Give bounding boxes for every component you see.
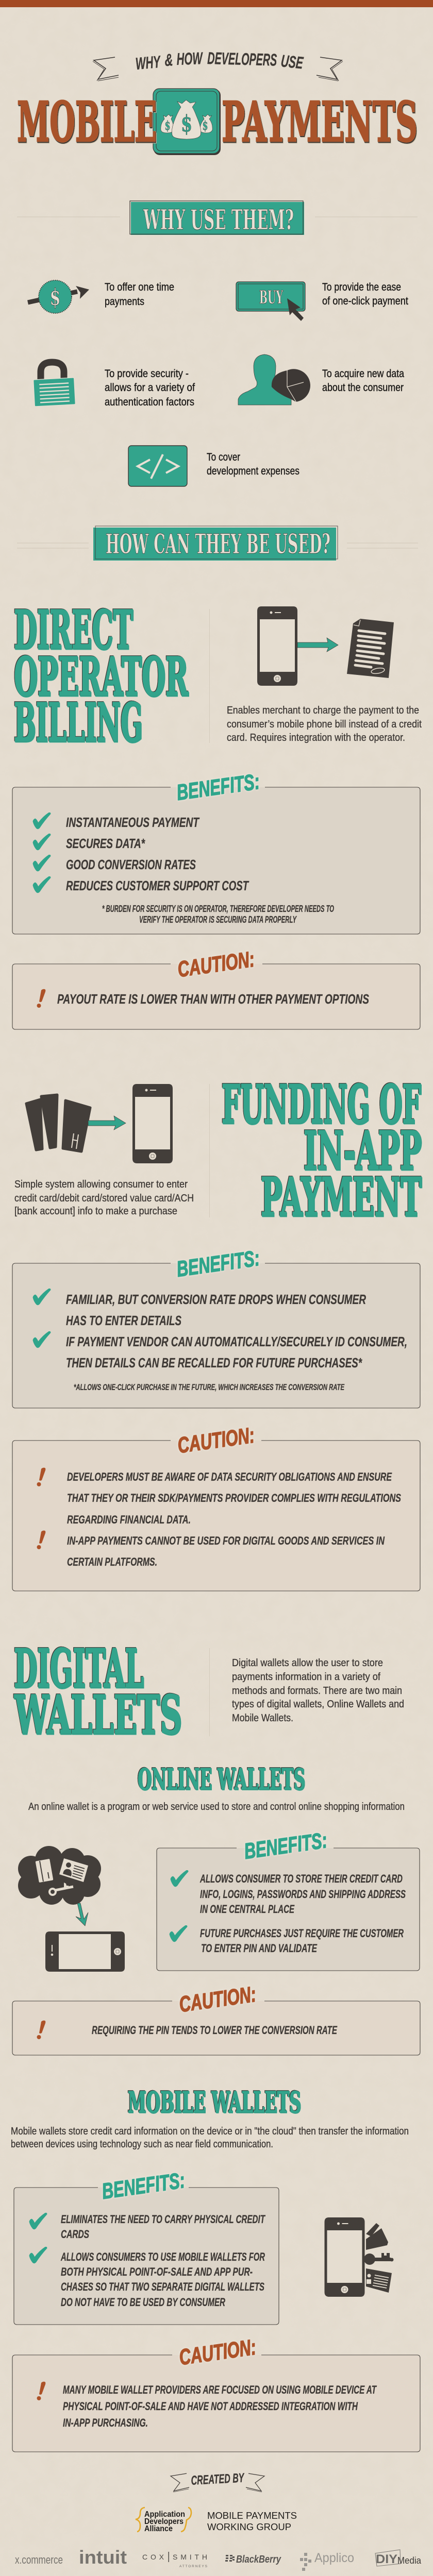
logo: applico: Applico bbox=[314, 2551, 354, 2565]
label: caution: CAUTION: bbox=[176, 1423, 256, 1458]
label: caution: CAUTION: bbox=[178, 2335, 258, 2370]
icon: phone with card, key and id bbox=[325, 2217, 394, 2297]
benefit list bbox=[199, 1872, 406, 1955]
heading: ONLINE WALLETS bbox=[138, 1762, 305, 1797]
benefit list: ALLOWS CONSUMERS TO USE MOBILE WALLETS FOR bbox=[60, 2250, 265, 2263]
sponsor logos bbox=[15, 2547, 422, 2576]
icon: code tag bbox=[128, 446, 187, 486]
caution list: REGARDING FINANCIAL DATA. bbox=[67, 1513, 191, 1526]
title bbox=[17, 90, 418, 155]
ribbon: created by: CREATED BY bbox=[191, 2471, 245, 2488]
logo: diy media: DIY bbox=[376, 2552, 397, 2566]
label: caution: CAUTION: bbox=[178, 1982, 258, 2017]
description: types of digital wallets, Online Wallets and bbox=[232, 1698, 404, 1710]
panel: caution, direct operator billing bbox=[12, 947, 420, 1029]
reason: consumer data: To acquire new data bbox=[322, 368, 404, 380]
icon: exclamation bbox=[37, 2021, 45, 2039]
money bag badge: $ bbox=[165, 118, 170, 133]
icon: buy button with cursor: BUY bbox=[259, 287, 284, 308]
heading: DIGITAL bbox=[14, 1638, 144, 1700]
caution list bbox=[67, 1470, 401, 1568]
section heading: why use them: WHY USE THEM? bbox=[143, 204, 294, 236]
icon: exclamation bbox=[37, 989, 45, 1008]
header bbox=[17, 48, 418, 155]
reason: development expenses: To cover bbox=[207, 451, 240, 463]
logo: mobile payments working group: MOBILE PAYMENTS bbox=[207, 2510, 297, 2521]
icon: phone to bill bbox=[257, 606, 394, 686]
logo: application developers alliance bbox=[136, 2507, 191, 2533]
benefit list: IN ONE CENTRAL PLACE bbox=[200, 1903, 295, 1916]
description bbox=[11, 2125, 409, 2150]
reason: one time payments bbox=[28, 280, 174, 313]
check marks bbox=[170, 1870, 188, 1942]
label: benefits: BENEFITS: bbox=[101, 2168, 187, 2204]
section: direct operator billing bbox=[14, 599, 422, 754]
check marks bbox=[29, 2213, 47, 2263]
description bbox=[227, 704, 422, 743]
reason: one time payments: payments bbox=[105, 296, 144, 308]
section: digital wallets bbox=[14, 1638, 404, 1746]
section: online wallets bbox=[12, 1762, 420, 2055]
exclamation marks bbox=[37, 1468, 45, 1549]
benefit list: DO NOT HAVE TO BE USED BY CONSUMER bbox=[61, 2296, 226, 2309]
heading: DIRECT bbox=[14, 599, 133, 661]
top bar bbox=[0, 0, 433, 7]
icon: cloud to device bbox=[18, 1846, 125, 1972]
check marks bbox=[33, 1289, 51, 1348]
panel: caution, mobile wallets bbox=[12, 2335, 420, 2452]
description: Digital wallets allow the user to store bbox=[232, 1657, 383, 1669]
benefit list bbox=[66, 1292, 407, 1370]
description: Simple system allowing consumer to enter bbox=[14, 1178, 188, 1190]
icon: person with pie chart bbox=[238, 354, 310, 405]
benefit list: BOTH PHYSICAL POINT-OF-SALE AND APP PUR- bbox=[61, 2265, 253, 2278]
description bbox=[14, 1178, 194, 1217]
benefit list bbox=[66, 815, 249, 893]
ribbon: created by bbox=[171, 2471, 264, 2492]
label: benefits: BENEFITS: bbox=[243, 1828, 329, 1864]
icon: coin with arrow bbox=[28, 280, 89, 313]
description: between devices using technology such as near field communication. bbox=[11, 2138, 273, 2150]
footnote: VERIFY THE OPERATOR IS SECURING DATA PROPERLY bbox=[139, 914, 297, 925]
subtitle ribbon: USE bbox=[280, 51, 305, 73]
section heading: why use them bbox=[17, 201, 418, 236]
logo: diy media: Media bbox=[397, 2555, 422, 2566]
logo: mobile payments working group bbox=[207, 2510, 297, 2532]
logo: cox smith: ATTORNEYS bbox=[179, 2565, 208, 2568]
title: MOBILE bbox=[17, 90, 157, 155]
icon: buy button with cursor bbox=[236, 282, 305, 321]
caution list: IN-APP PURCHASING. bbox=[63, 2416, 148, 2429]
benefit list: CARDS bbox=[61, 2228, 89, 2241]
heading: BILLING bbox=[14, 692, 143, 754]
label: benefits: BENEFITS: bbox=[175, 769, 261, 805]
icon: cards to phone bbox=[26, 1084, 173, 1163]
benefit list: CHASES SO THAT TWO SEPARATE DIGITAL WALLETS bbox=[61, 2280, 264, 2293]
logo: mobile payments working group: WORKING GROUP bbox=[207, 2521, 291, 2532]
heading bbox=[14, 1638, 182, 1746]
benefit list: GOOD CONVERSION RATES bbox=[66, 857, 196, 872]
benefit list: SECURES DATA* bbox=[66, 836, 145, 851]
description: payments information in a variety of bbox=[232, 1671, 380, 1683]
benefit list bbox=[60, 2213, 266, 2309]
reason: one time payments: To offer one time bbox=[105, 281, 174, 293]
panel: benefits, in-app payment bbox=[12, 1246, 420, 1408]
icon: exclamation bbox=[37, 2382, 45, 2400]
logo: diy media bbox=[375, 2550, 422, 2566]
reason: one-click payment: of one-click payment bbox=[322, 295, 408, 307]
panel: caution, online wallets bbox=[12, 1982, 420, 2055]
icon: padlock bbox=[34, 362, 75, 406]
description: card. Requires integration with the operator. bbox=[227, 732, 405, 743]
logo: intuit: intuit bbox=[79, 2547, 127, 2568]
heading: OPERATOR bbox=[14, 646, 189, 708]
label: caution: CAUTION: bbox=[176, 947, 256, 982]
panel: caution, in-app payment bbox=[12, 1423, 420, 1591]
subtitle ribbon: & bbox=[164, 50, 173, 70]
heading bbox=[14, 599, 189, 754]
logo: application developers alliance: Developers bbox=[144, 2517, 184, 2526]
heading bbox=[222, 1074, 422, 1228]
logo: application developers alliance: Application bbox=[144, 2510, 185, 2519]
money bag badge: $ bbox=[181, 111, 192, 137]
benefit list: INSTANTANEOUS PAYMENT bbox=[66, 815, 200, 830]
section: funding of in-app payment bbox=[14, 1074, 422, 1228]
panel: benefits, mobile wallets bbox=[14, 2168, 279, 2325]
logo: cox smith: COX bbox=[142, 2553, 164, 2561]
reason: one-click payment: To provide the ease bbox=[322, 281, 401, 293]
panel: benefits, direct operator billing bbox=[12, 769, 420, 934]
reason: security bbox=[34, 362, 195, 408]
subtitle ribbon: WHY bbox=[135, 52, 162, 73]
benefit list: HAS TO ENTER DETAILS bbox=[66, 1313, 181, 1328]
logo: cox smith bbox=[142, 2552, 208, 2568]
description bbox=[232, 1657, 404, 1724]
description: [bank account] info to make a purchase bbox=[14, 1205, 177, 1217]
description: credit card/debit card/stored value card/ACH bbox=[14, 1192, 194, 1204]
icon: coin with arrow: $ bbox=[49, 284, 61, 311]
reason: development expenses: development expenses bbox=[207, 465, 299, 477]
reason: consumer data bbox=[238, 354, 404, 405]
money bag badge bbox=[153, 89, 221, 155]
money bag badge: $ bbox=[202, 118, 208, 133]
description: Mobile Wallets. bbox=[232, 1712, 293, 1724]
logo: application developers alliance: Alliance bbox=[144, 2524, 173, 2533]
reason: security: authentication factors bbox=[105, 396, 194, 408]
heading: MOBILE WALLETS bbox=[128, 2086, 301, 2120]
logo: x.commerce: x.commerce bbox=[15, 2553, 63, 2566]
section: mobile wallets bbox=[11, 2086, 420, 2452]
subtitle ribbon: HOW bbox=[176, 48, 204, 69]
heading: WALLETS bbox=[14, 1684, 182, 1746]
reason: security: To provide security - bbox=[105, 368, 189, 380]
reason: development expenses bbox=[128, 446, 299, 486]
reason: one-click payment bbox=[236, 281, 408, 321]
benefit list: TO ENTER PIN AND VALIDATE bbox=[201, 1942, 318, 1955]
footnote bbox=[102, 904, 334, 925]
reason: consumer data: about the consumer bbox=[322, 382, 404, 394]
created by bbox=[15, 2471, 422, 2576]
reason: security: allows for a variety of bbox=[105, 382, 195, 394]
check marks bbox=[33, 812, 51, 893]
section heading: how can they be used bbox=[17, 526, 418, 561]
panel: benefits, online wallets bbox=[157, 1828, 420, 1971]
logo: applico bbox=[300, 2551, 354, 2571]
logo: cox smith: SMITH bbox=[173, 2553, 207, 2561]
subtitle ribbon: DEVELOPERS bbox=[207, 48, 277, 70]
label: benefits: BENEFITS: bbox=[175, 1246, 261, 1282]
subtitle ribbon bbox=[93, 48, 343, 81]
caution list bbox=[63, 2383, 377, 2429]
benefit list: ELIMINATES THE NEED TO CARRY PHYSICAL CREDIT bbox=[61, 2213, 266, 2226]
logo: blackberry: BlackBerry bbox=[236, 2554, 281, 2565]
description: methods and formats. There are two main bbox=[232, 1685, 402, 1697]
logo: blackberry bbox=[225, 2554, 281, 2565]
benefit list: REDUCES CUSTOMER SUPPORT COST bbox=[66, 878, 249, 893]
caution list: CERTAIN PLATFORMS. bbox=[67, 1555, 157, 1568]
